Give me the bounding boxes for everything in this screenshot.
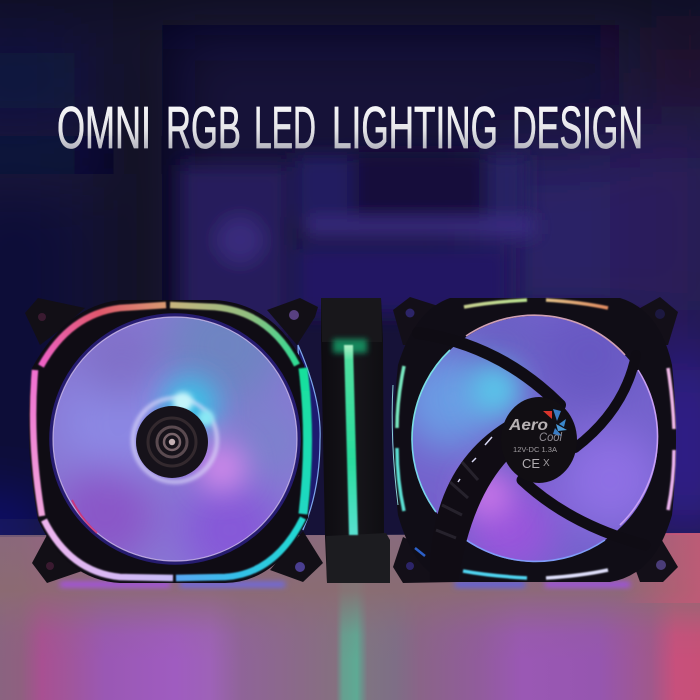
outer translucent blue side [298, 345, 320, 530]
translucent blade disc [412, 316, 658, 562]
title: LIGHTING [332, 95, 498, 161]
right light segments [668, 368, 674, 510]
rating label: 12V-DC 1.3A [513, 447, 557, 454]
mounting holes [38, 310, 305, 572]
green LED strip [344, 345, 358, 535]
fan frame [29, 300, 311, 583]
disc rim [51, 315, 299, 563]
certification marks: CE [522, 456, 540, 471]
mounting ears [25, 298, 323, 583]
disc highlight [53, 317, 297, 561]
title: RGB [166, 95, 241, 161]
red rim streak [72, 500, 97, 533]
disposal mark: X [543, 458, 550, 469]
middle fan, side view [321, 298, 390, 583]
bottom light segments [463, 570, 608, 578]
hub glow [133, 392, 217, 482]
RGB light ring [33, 305, 308, 578]
title [57, 95, 643, 161]
brand name second line: Cool [539, 430, 562, 444]
right fan, back view [392, 297, 678, 583]
logo mark [543, 409, 567, 436]
brand name: Aero [508, 417, 548, 434]
fan frame [394, 298, 676, 582]
left fan, front view [25, 285, 323, 583]
fan hub [136, 406, 208, 478]
upper bracket [321, 298, 382, 342]
support struts [418, 333, 645, 545]
cable-carrying strut [415, 422, 518, 582]
left light segments [397, 366, 404, 511]
mounting holes [406, 308, 666, 570]
green glow [333, 339, 367, 353]
title: LED [254, 95, 316, 161]
table surface with reflections [0, 533, 700, 700]
title: OMNI [57, 95, 151, 161]
top light segments [464, 300, 608, 308]
hub sticker [501, 397, 577, 483]
left edge line [392, 385, 398, 505]
translucent blade disc [53, 317, 297, 561]
disc rim [412, 315, 658, 561]
lower bracket [326, 533, 390, 583]
mounting ears [393, 297, 678, 583]
